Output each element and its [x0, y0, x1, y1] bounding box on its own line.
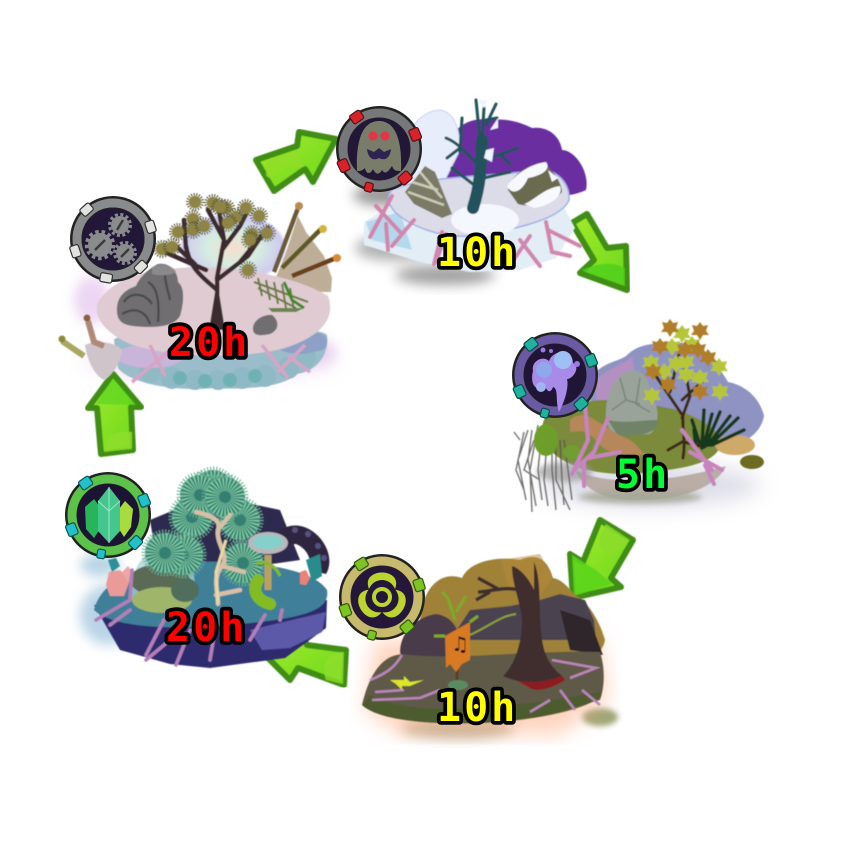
- rainbow halo: [181, 214, 285, 282]
- crystal icon: [85, 487, 133, 543]
- banner with music note: ♫: [451, 632, 469, 656]
- timer: 10h lava: 10h: [437, 685, 518, 731]
- lava pool: [510, 668, 565, 690]
- banner with music note: [434, 592, 516, 680]
- small grey rock: [253, 315, 277, 335]
- arrow: bottom pointing to crystal island: [265, 635, 346, 685]
- fog band: [537, 462, 593, 482]
- cloud base: [114, 328, 327, 390]
- timer: 20h coral: 20h: [166, 605, 247, 651]
- ground: [362, 652, 604, 723]
- slime icon: [532, 348, 580, 412]
- pink sand ground: [97, 267, 330, 356]
- badge: gears: [69, 196, 157, 283]
- blue-purple cloud: [590, 342, 764, 450]
- green ground: [542, 400, 722, 474]
- snow dome: [402, 110, 460, 190]
- toxic splash: [390, 676, 424, 690]
- ribs and vine: [254, 278, 308, 312]
- badge: biohazard: [339, 554, 426, 641]
- badge: slime: [512, 332, 598, 419]
- yellow-leaved tree: [642, 319, 729, 458]
- dark rocks: [400, 594, 603, 671]
- island: snow (ghost): [364, 100, 587, 272]
- large grey rock: [117, 264, 183, 327]
- sail with pipes: [270, 202, 341, 292]
- snowy rock: [507, 162, 562, 208]
- arrow: left side pointing to desert island: [88, 374, 141, 454]
- teal water ground: [94, 562, 327, 627]
- grey rock: [606, 370, 658, 436]
- arrow: top right pointing to swamp island: [572, 214, 627, 290]
- arrow: top left pointing to ghost island: [256, 132, 336, 191]
- hanging roots: [514, 425, 572, 512]
- glass dome and bushes: [130, 546, 199, 613]
- pink roots: [96, 570, 282, 665]
- palm bush: [692, 410, 744, 448]
- ghost icon: [357, 121, 401, 174]
- purple coral base: [94, 600, 327, 668]
- snow ground: [388, 170, 569, 236]
- gear icons: [86, 214, 136, 264]
- pink roots: [572, 405, 722, 486]
- crystals: [106, 554, 322, 596]
- bird bath on caterpillar: [248, 532, 288, 604]
- island: coral (crystal): [94, 469, 329, 668]
- coral tree: [144, 469, 264, 604]
- dark tentacle: [276, 525, 329, 574]
- joshua tree: [154, 194, 274, 330]
- island: desert (mechanical): [58, 194, 341, 390]
- fallen log: [570, 415, 648, 455]
- dead tree: [476, 562, 562, 682]
- island: swamp (slime): [514, 319, 764, 512]
- ice block base: [364, 200, 575, 272]
- tilted stone: [405, 166, 452, 218]
- soft ground shadows: [80, 184, 760, 738]
- timer: 10h snow: 10h: [437, 230, 518, 276]
- timer: 5h swamp: 5h: [616, 452, 670, 498]
- badge: ghost: [336, 106, 422, 193]
- badge: crystal: [65, 472, 151, 559]
- snow caps on tree: [478, 100, 498, 162]
- pink roots: [132, 345, 310, 382]
- pink roots: [370, 655, 600, 712]
- bushes: [534, 424, 558, 456]
- dead teal tree: [446, 100, 518, 208]
- dark coral back: [150, 495, 300, 580]
- timer: 20h desert: 20h: [169, 320, 250, 366]
- olive cloud: [420, 557, 605, 665]
- stump: [715, 435, 755, 455]
- small floating rock with pipes: [58, 314, 122, 380]
- arrow: right side pointing to lava island: [570, 520, 633, 598]
- biohazard icon: [354, 572, 410, 622]
- mossy stone: [448, 680, 468, 690]
- purple cloud: [447, 119, 587, 205]
- orange glow: [365, 640, 608, 735]
- pink roots: [370, 196, 580, 268]
- snow mound: [451, 204, 519, 236]
- island: lava (toxic): [362, 554, 608, 735]
